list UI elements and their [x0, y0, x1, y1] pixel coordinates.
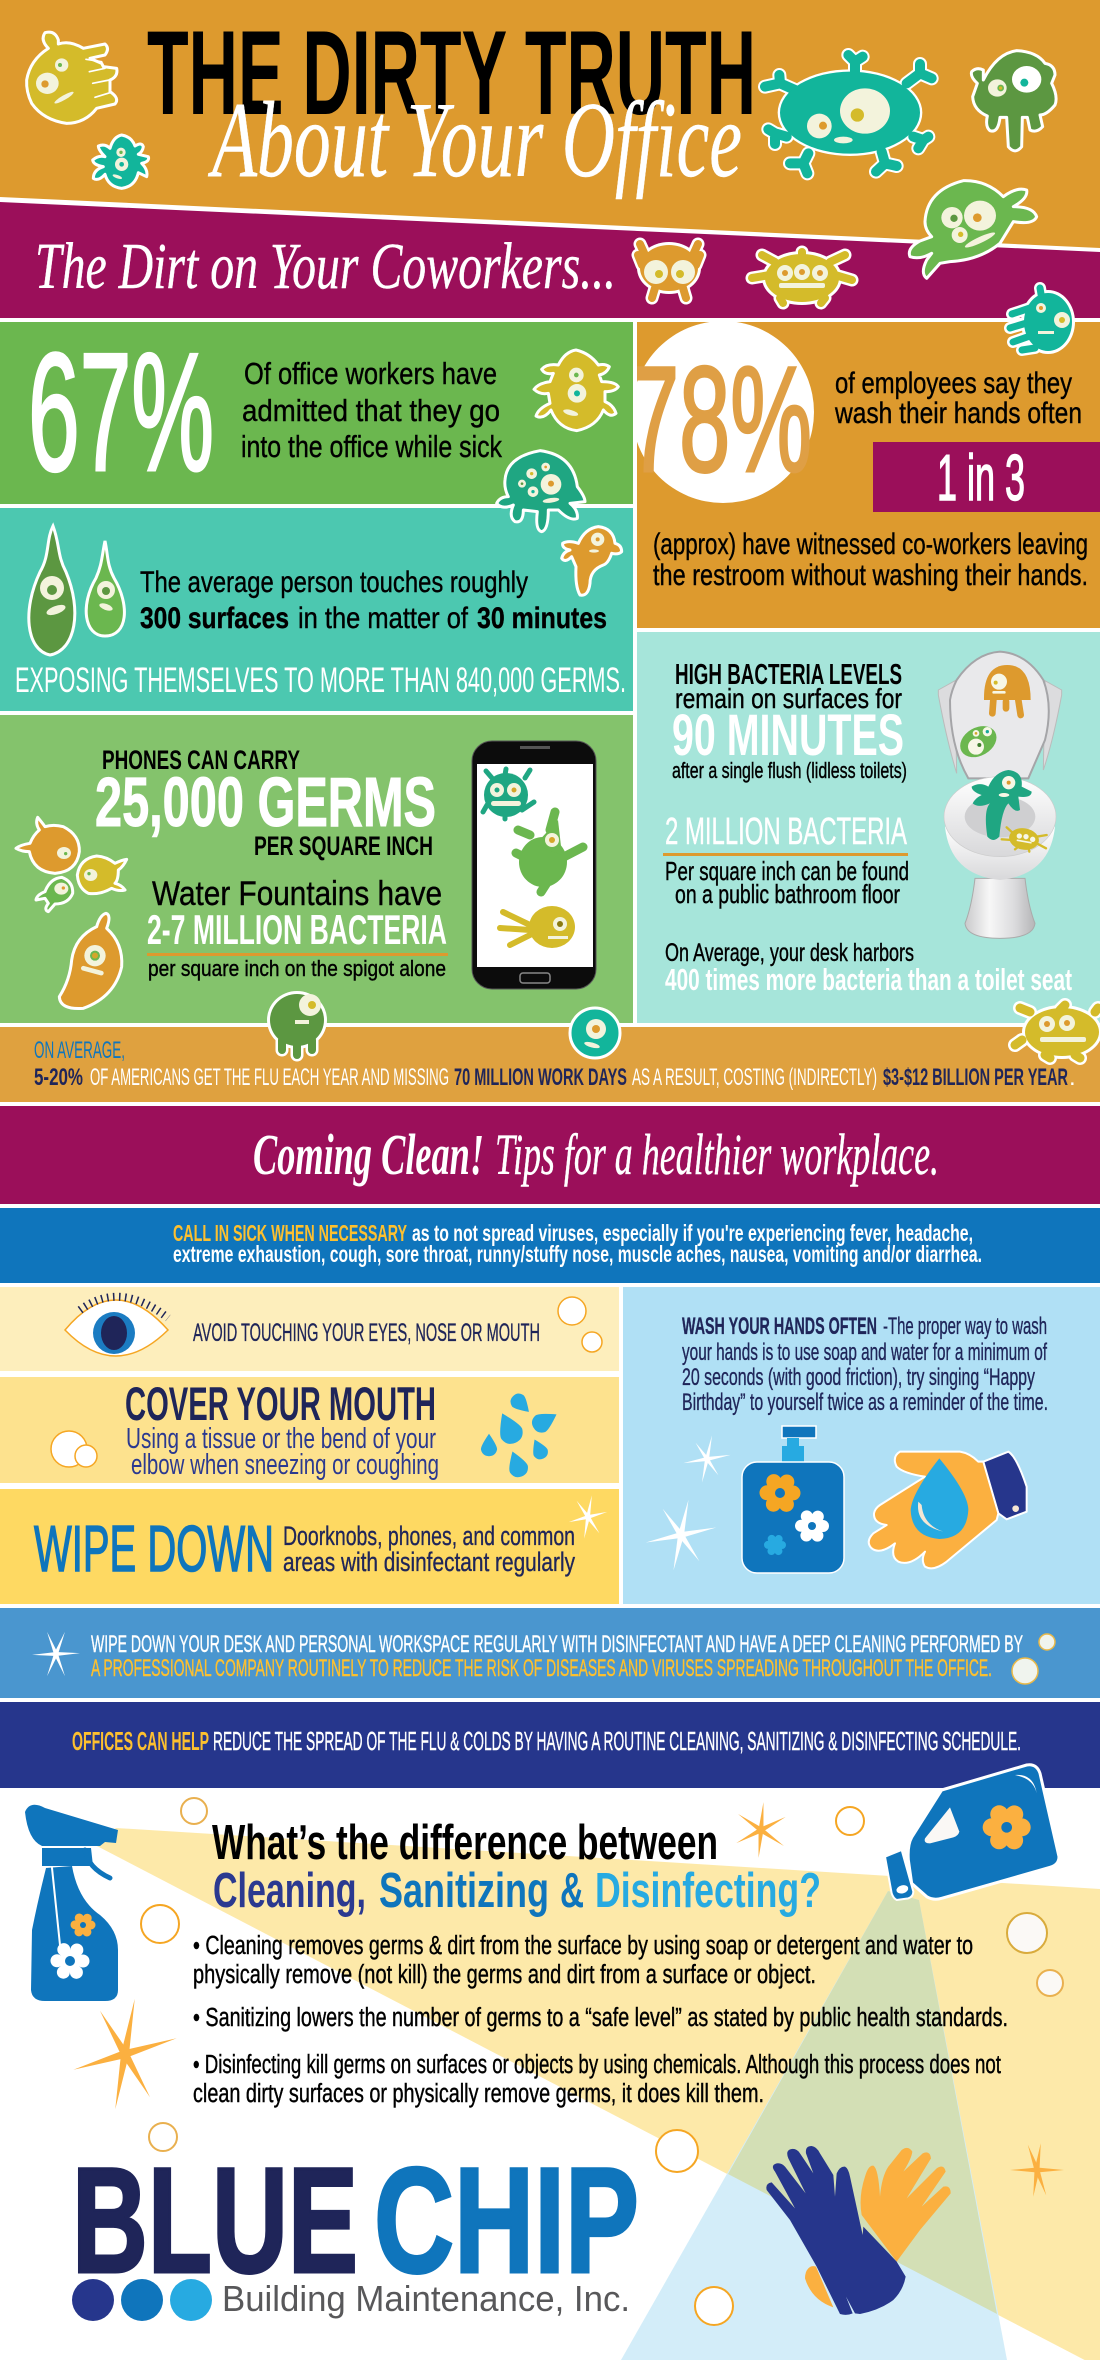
panel: offices can help: OFFICES CAN HELP — [72, 1726, 209, 1756]
text: average person touches: The average person touches roughly — [140, 566, 528, 599]
icon: eye — [65, 1297, 168, 1356]
icon: orange star right — [1010, 2143, 1064, 2197]
text: desk harbors 400 times: On Average, your desk harbors — [665, 939, 914, 967]
text: water fountains: Water Fountains have — [152, 875, 442, 913]
text: high bacteria levels: after a single flush (lidless toilets) — [672, 758, 907, 783]
panel: call in sick: CALL IN SICK WHEN NECESSARY — [173, 1220, 407, 1246]
text: employees wash hands — [834, 367, 1082, 430]
heading: cover your mouth: COVER YOUR MOUTH — [125, 1377, 436, 1430]
icon: sparkle — [32, 1631, 80, 1677]
germ: big teal — [765, 55, 932, 173]
germ: teal lower — [570, 1008, 620, 1058]
text: water fountains: per square inch on the spigot alone — [148, 956, 446, 981]
germ: orange blob — [562, 527, 622, 595]
icon: spray bottle — [25, 1805, 118, 2001]
panel: toilet bacteria — [637, 632, 1100, 1023]
text: doorknobs: areas with disinfectant regularly — [283, 1547, 575, 1577]
text: flu stat line: OF AMERICANS GET THE FLU EACH YEAR AND MISSING — [90, 1064, 449, 1091]
subtitle: about your office: About Your Office — [208, 81, 742, 200]
germ: small teal top left — [93, 135, 149, 188]
text: office workers sick: into the office while sick — [241, 429, 502, 464]
germ cluster: left of phone — [16, 817, 127, 1009]
header banner — [0, 0, 1100, 318]
phone germ: yellow — [500, 906, 575, 948]
text: high bacteria levels: HIGH BACTERIA LEVELS — [675, 659, 902, 691]
germ: dark green lower — [267, 991, 327, 1055]
text: co-workers leaving restroom — [653, 528, 1088, 592]
section heading: coming clean: Coming Clean! — [253, 1122, 484, 1187]
panel: cover your mouth — [0, 1377, 619, 1483]
text: on average: ON AVERAGE, — [34, 1037, 125, 1064]
icon: sparkle small — [683, 1435, 731, 1483]
stat: 78%: 78% — [628, 335, 812, 503]
flower orange — [75, 1917, 91, 1933]
text: flu stat line: . — [1069, 1064, 1076, 1091]
icon: orange star large — [72, 1998, 178, 2110]
heading: what's the difference: & — [560, 1864, 584, 1918]
text: tissue or elbow: elbow when sneezing or coughing — [131, 1449, 439, 1481]
germ: dark teal — [497, 451, 585, 532]
germ: light green pod — [86, 541, 124, 636]
text: flu stat line: 70 MILLION WORK DAYS — [454, 1064, 627, 1091]
heading: what's the difference: Cleaning, — [213, 1864, 366, 1918]
stat: 67%: 67% — [28, 318, 214, 506]
text: phones can carry: 25,000 GERMS — [95, 763, 436, 841]
icon: toilet with germs — [938, 652, 1062, 938]
germ: green on diagonal — [909, 181, 1037, 278]
toilet germ: yellow — [1002, 826, 1047, 852]
text: phones can carry — [95, 745, 436, 861]
text: proper hand washing: WASH YOUR HANDS OFTEN — [682, 1313, 877, 1340]
toilet germ: green — [955, 720, 1002, 763]
text: water fountains: 2-7 MILLION BACTERIA — [147, 906, 447, 953]
germ: yellow right edge — [1015, 1005, 1100, 1059]
text: 2 million bacteria: on a public bathroom floor — [675, 879, 900, 909]
text: definitions — [193, 1932, 1008, 2108]
text: high bacteria levels — [672, 659, 907, 783]
germ: dark green dripping — [971, 51, 1056, 151]
panel: wipe down — [0, 1489, 619, 1604]
icon: sparkle — [568, 1495, 608, 1539]
icon: sparkle large — [645, 1499, 717, 1571]
text: water fountains — [147, 875, 448, 981]
flower orange — [767, 1480, 793, 1506]
section heading: the dirt on your coworkers: The Dirt on Your Coworkers... — [35, 230, 616, 303]
germ: yellow in band — [752, 251, 852, 305]
germ: teal right — [1010, 288, 1075, 354]
heading: what's the difference: Sanitizing — [379, 1864, 549, 1918]
text: flu stat line: 5-20% — [34, 1064, 83, 1091]
text: flu stat line: AS A RESULT, COSTING (INDIRECTLY) — [632, 1064, 877, 1091]
text: tissue or elbow — [126, 1423, 439, 1481]
text: phones can carry: PER SQUARE INCH — [254, 831, 433, 861]
heading: wipe down: WIPE DOWN — [34, 1512, 274, 1585]
logo: blue chip — [72, 2136, 639, 2321]
icon: hand with drop — [869, 1452, 1027, 1568]
icon: soap dispenser — [742, 1426, 844, 1573]
section heading: coming clean — [0, 1106, 1100, 1204]
panel: call in sick — [0, 1208, 1100, 1283]
germ: yellow round — [77, 856, 127, 894]
text: average person touches — [140, 566, 607, 635]
bubbles: bottom section — [141, 1798, 1063, 2325]
flower white — [57, 1948, 83, 1974]
germ: orange round — [16, 817, 79, 873]
text: tissue or elbow: Using a tissue or the bend of your — [126, 1423, 436, 1455]
callout: 1 in 3: 1 in 3 — [937, 441, 1025, 514]
text: proper hand washing — [682, 1313, 1048, 1416]
heading: what's the difference — [212, 1816, 821, 1918]
bubbles — [51, 1431, 97, 1467]
heading: what's the difference: Disinfecting? — [595, 1864, 821, 1918]
text: 2 million bacteria: 2 MILLION BACTERIA — [665, 811, 907, 853]
text: average person touches: 30 minutes — [477, 602, 607, 635]
bubbles — [558, 1297, 602, 1352]
text: flu stat line — [34, 1064, 1076, 1091]
toilet germ: teal — [972, 770, 1032, 840]
panel: wash your hands — [623, 1287, 1100, 1604]
panel: wipe desk band — [0, 1608, 1100, 1698]
panel: offices can help — [0, 1702, 1100, 1788]
logo: blue chip: BLUE — [72, 2136, 358, 2304]
germ: yellow hand top left — [27, 32, 117, 123]
icon: water drops — [481, 1390, 561, 1480]
text: high bacteria levels: 90 MINUTES — [672, 703, 904, 768]
text: doorknobs — [283, 1521, 575, 1577]
flower orange — [992, 1812, 1022, 1842]
text: wipe desk — [91, 1631, 1023, 1682]
text: average person touches: 300 surfaces — [140, 602, 289, 635]
phone germ: green — [516, 812, 583, 892]
panel: 67 percent — [0, 318, 633, 506]
text: 2 million bacteria: Per square inch can be found — [665, 856, 909, 886]
text: definitions: physically remove (not kill) the germs and dirt from a surface or object. — [193, 1961, 816, 1989]
text: doorknobs: Doorknobs, phones, and common — [283, 1521, 575, 1551]
flower blue — [768, 1538, 782, 1552]
text: definitions: clean dirty surfaces or physically remove germs, it does kill them. — [193, 2080, 764, 2108]
text: avoid touching: AVOID TOUCHING YOUR EYES, NOSE OR MOUTH — [193, 1319, 540, 1347]
text: high bacteria levels: remain on surfaces for — [675, 683, 902, 714]
panel: phones and fountains — [0, 715, 633, 1023]
text: office workers sick: Of office workers have — [244, 356, 497, 391]
text: 2 million bacteria — [663, 811, 909, 909]
germ: orange in band — [637, 242, 701, 298]
spray beams background — [95, 1828, 1100, 2360]
text: average person touches: in the matter of — [298, 602, 469, 635]
toilet germ: orange — [984, 665, 1031, 715]
germ: orange pod — [59, 913, 122, 1009]
icon: orange star top — [735, 1802, 787, 1858]
icon: smartphone with germs — [472, 741, 596, 989]
panel: flu statistic band — [0, 1027, 1100, 1102]
icon: bottle of disinfectant — [885, 1765, 1059, 1900]
icon: gloves — [766, 2146, 951, 2315]
logo: blue chip: CHIP — [374, 2136, 639, 2304]
panel: avoid touching eyes — [0, 1287, 619, 1371]
panel: 300 surfaces — [0, 508, 633, 711]
germ: small green — [36, 877, 73, 912]
text: office workers sick: admitted that they go — [242, 393, 500, 428]
text: exposing to 840,000 germs: EXPOSING THEMSELVES TO MORE THAN 840,000 GERMS. — [15, 661, 626, 700]
germ: yellow in green panel — [534, 350, 618, 431]
text: phones can carry: PHONES CAN CARRY — [102, 745, 300, 775]
germ: dark green pod — [29, 526, 75, 655]
bubbles — [1012, 1634, 1055, 1684]
circle behind 78% — [632, 321, 814, 503]
text: desk harbors 400 times — [665, 939, 1072, 997]
panel: 78 percent — [628, 321, 1100, 628]
heading: what's the difference: What’s the difference between — [212, 1816, 718, 1870]
phone germ: teal — [483, 769, 534, 819]
logo: blue chip: Building Maintenance, Inc. — [222, 2278, 630, 2319]
text: office workers sick — [241, 356, 502, 464]
flower white — [801, 1515, 823, 1537]
